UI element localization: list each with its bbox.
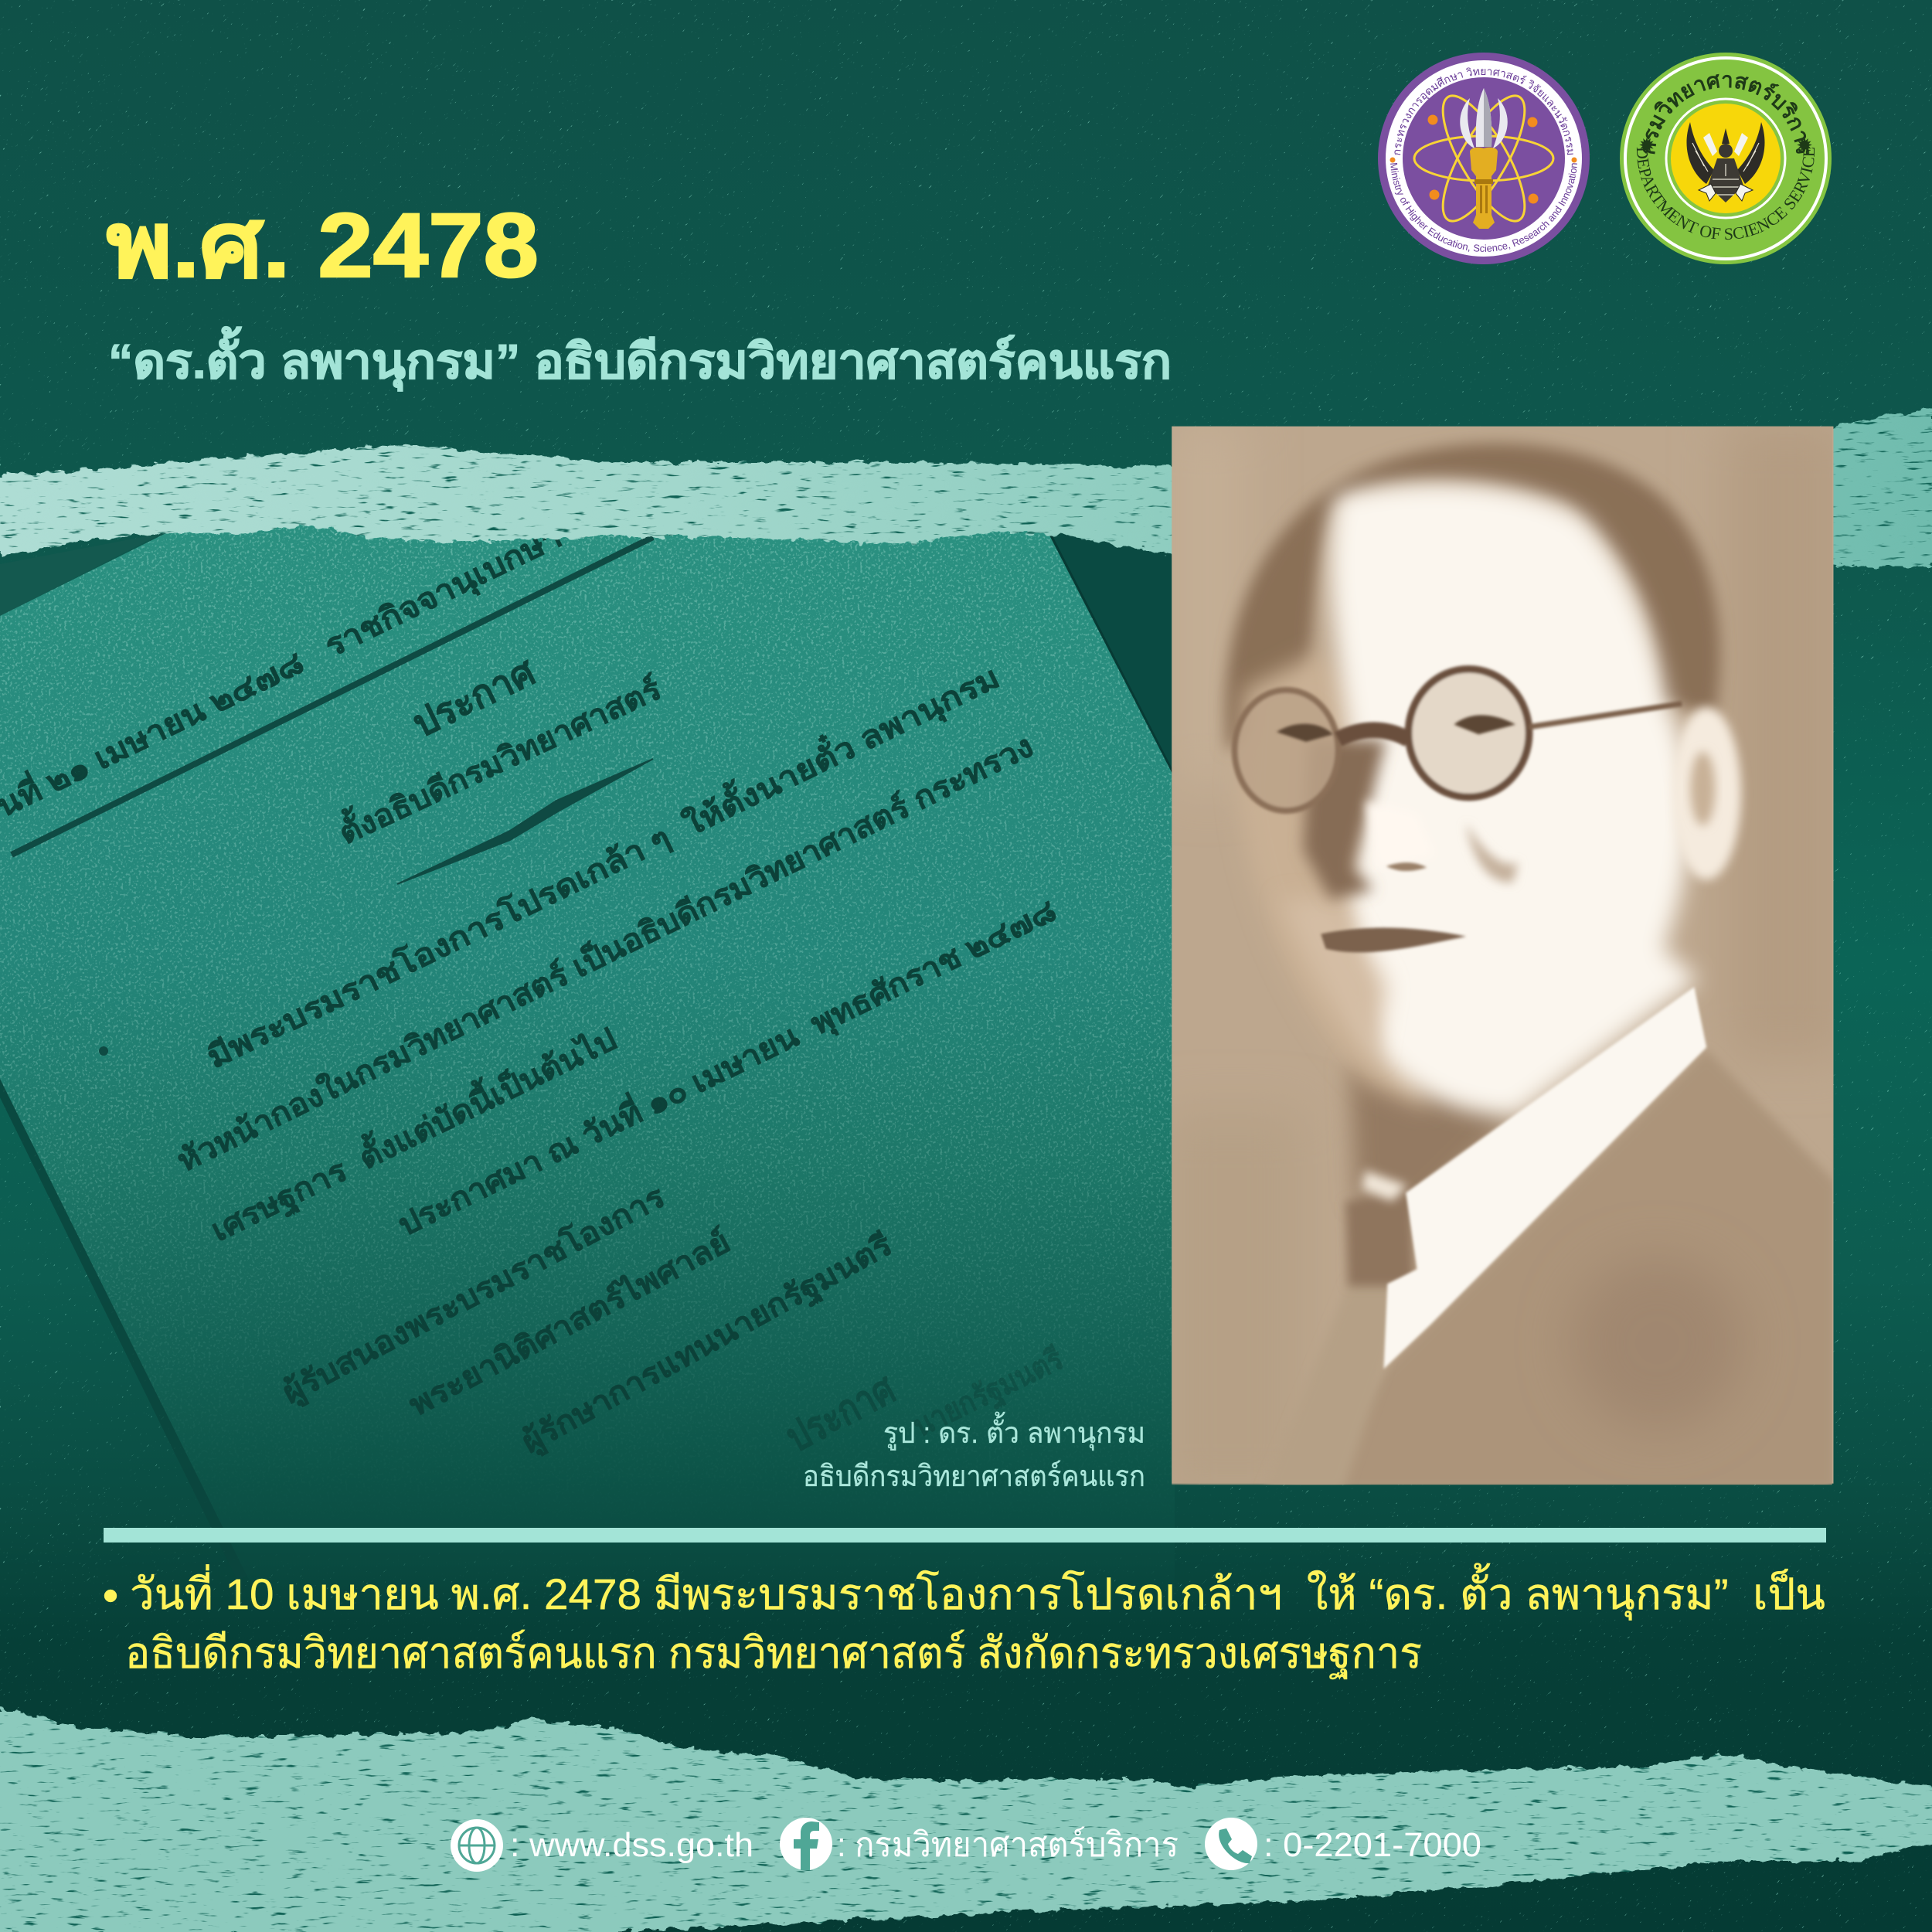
contact: phone: : 0-2201-7000	[1264, 1826, 1481, 1864]
document typed lines: นายกรัฐมนตรี	[908, 1342, 1070, 1447]
document typed lines: ประกาศมา ณ วันที่ ๑๐ เมษายน พุทธศักราช ๒๔๗๘	[391, 889, 1063, 1245]
document rule line	[12, 537, 653, 855]
contact: facebook: : กรมวิทยาศาสตร์บริการ	[837, 1826, 1179, 1864]
icon: facebook	[780, 1818, 832, 1870]
suit	[1281, 1049, 1836, 1491]
neck shadow	[1349, 1060, 1515, 1213]
sword emblem blades	[1476, 88, 1492, 147]
ear	[1672, 707, 1741, 879]
document typed lines: มีพระบรมราชโองการโปรดเกล้า ๆ ให้ตั้งนายตั๋ว ลพานุกรม	[199, 654, 1005, 1077]
cheek crease	[1466, 823, 1518, 883]
body text	[104, 1563, 1825, 1679]
atom orbits	[1414, 85, 1553, 232]
icon: globe	[451, 1819, 503, 1872]
document short flourish	[397, 759, 653, 884]
document typed lines: ผู้รับสนองพระบรมราชโองการ	[277, 1178, 672, 1412]
document typed lines: พระยานิติศาสตร์ไพศาลย์	[403, 1223, 736, 1423]
body text: อธิบดีกรมวิทยาศาสตร์คนแรก กรมวิทยาศาสตร์ สังกัดกระทรวงเศรษฐการ	[125, 1628, 1422, 1679]
ministry ring text: กระทรวงการอุดมศึกษา วิทยาศาสตร์ วิจัยและนวัตกรรม	[1394, 68, 1573, 155]
logo: Department of Science Service: DEPARTMENT OF SCIENCE SERVICE	[1633, 147, 1818, 243]
body text: วันที่ 10 เมษายน พ.ศ. 2478 มีพระบรมราชโองการโปรดเกล้าฯ ให้ “ดร. ตั้ว ลพานุกรม” เป็น	[130, 1563, 1825, 1621]
photo backdrop tone	[1158, 419, 1849, 1503]
hair	[1225, 444, 1720, 752]
photo caption: รูป : ดร. ตั้ว ลพานุกรม	[883, 1411, 1145, 1451]
contact: website: : www.dss.go.th	[510, 1826, 753, 1864]
title: พ.ศ. 2478	[107, 195, 539, 297]
jaw shading	[1281, 900, 1386, 1060]
portrait photo of Dr. Tua Laphanukrom	[1158, 419, 1849, 1503]
document shadow	[0, 510, 1175, 1577]
sword emblem handle	[1470, 148, 1498, 229]
lips	[1321, 927, 1466, 952]
nose tip and nostril	[1366, 801, 1435, 869]
tie	[1263, 1281, 1411, 1491]
icon: phone	[1205, 1818, 1257, 1870]
stars: ✹	[1638, 134, 1655, 157]
document typed lines: หัวหน้ากองในกรมวิทยาศาสตร์ เป็นอธิบดีกรมวิทยาศาสตร์ กระทรวง	[171, 726, 1039, 1179]
nose shadow	[1304, 740, 1386, 900]
document typed lines: เศรษฐการ ตั้งแต่บัดนี้เป็นต้นไป	[203, 1016, 623, 1251]
glasses	[1235, 669, 1682, 811]
contact: phone	[1205, 1818, 1481, 1870]
contact: facebook	[780, 1818, 1179, 1870]
document typed lines: ตั้งอธิบดีกรมวิทยาศาสตร์	[332, 666, 667, 851]
eyes	[1277, 715, 1515, 742]
electrons	[1428, 114, 1538, 204]
contact: website	[451, 1819, 753, 1872]
garuda emblem	[1687, 122, 1764, 202]
torn paper strip: bottom	[0, 1706, 1932, 1932]
document typed lines: ประกาศ	[778, 1366, 903, 1461]
photo caption	[803, 1411, 1145, 1493]
logo: Department of Science Service	[1620, 53, 1832, 264]
department ring text: กรมวิทยาศาสตร์บริการ	[1635, 68, 1816, 156]
divider bar	[104, 1528, 1826, 1543]
document typed lines	[0, 515, 1070, 1462]
document typed lines: ประกาศ	[406, 649, 543, 746]
torn paper strip: top	[0, 408, 1932, 566]
document bullet dot	[99, 1046, 108, 1056]
logo: Ministry of Higher Education, Science, Research and Innovation: Ministry of Higher Education, Science, Research and Innovation	[1390, 163, 1577, 252]
document typed lines: นที่ ๒๑ เมษายน ๒๔๗๘ ราชกิจจานุเบกษา	[0, 515, 568, 826]
face highlight	[1331, 484, 1698, 1115]
photo caption: อธิบดีกรมวิทยาศาสตร์คนแรก	[803, 1460, 1145, 1493]
scanned royal announcement document	[0, 495, 1175, 1592]
logo: Ministry of Higher Education, Science, Research and Innovation	[1378, 53, 1590, 264]
left cheek	[1238, 653, 1430, 1109]
shirt collar	[1384, 987, 1706, 1369]
document typed lines: ผู้รักษาการแทนนายกรัฐมนตรี	[516, 1227, 900, 1462]
logo: Department of Science Service: ✹	[1796, 134, 1813, 157]
subtitle: “ดร.ตั้ว ลพานุกรม” อธิบดีกรมวิทยาศาสตร์คนแรก	[108, 326, 1172, 391]
